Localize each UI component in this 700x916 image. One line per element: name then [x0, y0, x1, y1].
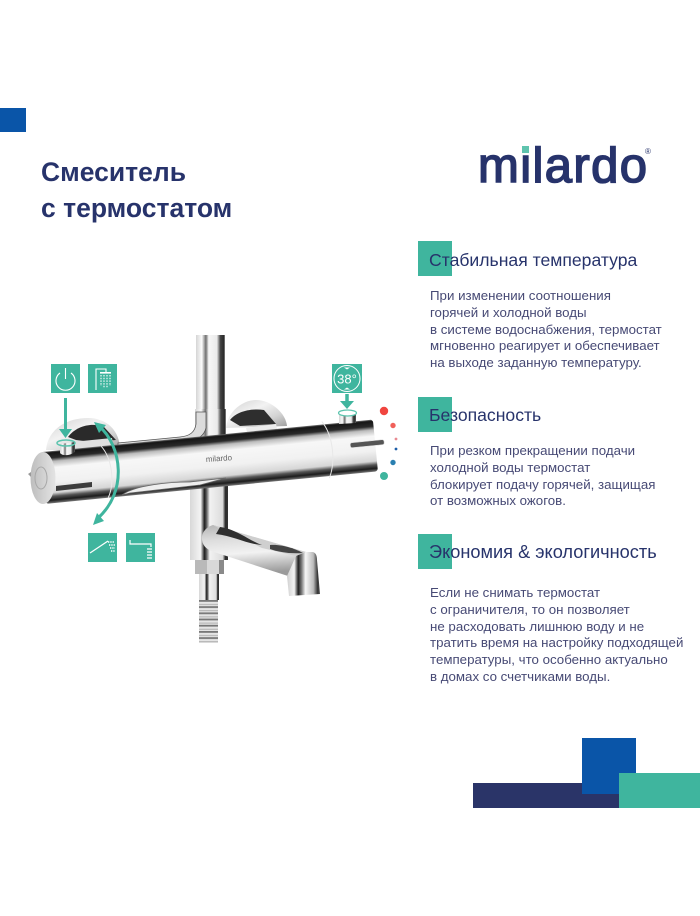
vertical riser pipe — [195, 335, 226, 439]
decorative bar: navy — [473, 783, 623, 808]
flexible hose — [199, 600, 218, 643]
title: с термостатом — [41, 193, 232, 223]
icon: hand shower — [88, 533, 117, 562]
temperature dots — [380, 407, 397, 480]
riser bend into body — [118, 412, 206, 449]
text: stable temperature: мгновенно реагирует и обеспечивает — [430, 338, 660, 353]
icon: 38 degree display — [332, 364, 362, 393]
text: stable temperature: на выходе заданную температуру. — [430, 355, 642, 370]
text: safety: холодной воды термостат — [430, 460, 590, 475]
text: economy: не расходовать лишнюю воду и не — [430, 618, 644, 634]
bath spout — [202, 525, 320, 596]
faucet illustration with callouts — [28, 335, 398, 643]
accent square 2 — [418, 397, 452, 432]
heading: stable temperature: Стабильная температура — [429, 250, 637, 270]
logo: milardo: ® — [645, 147, 651, 156]
hose stem — [199, 574, 219, 600]
text: economy: тратить время на настройку подходящей — [430, 635, 683, 650]
text: stable temperature: горячей и холодной воды — [430, 305, 587, 320]
accent square 1 — [418, 241, 452, 276]
icon: bath spout — [126, 533, 155, 562]
heading: safety: Безопасность — [429, 405, 541, 425]
right groove — [350, 440, 384, 448]
text: safety — [430, 443, 655, 508]
text: economy: с ограничителя, то он позволяет — [430, 602, 630, 617]
arrow: 38 degree to knob — [338, 394, 356, 416]
text: stable temperature: При изменении соотношения — [430, 288, 611, 303]
left selector knob — [60, 442, 75, 455]
left groove — [56, 482, 92, 491]
hose nut — [195, 560, 224, 574]
end cap — [28, 452, 56, 504]
right wall mount — [226, 400, 287, 432]
text: economy: в домах со счетчиками воды. — [430, 669, 610, 684]
decorative bar: teal — [619, 773, 700, 808]
title — [41, 157, 232, 223]
icon: power button — [51, 364, 80, 393]
text: stable temperature — [430, 288, 662, 370]
text: safety: При резком прекращении подачи — [430, 443, 635, 458]
arrow: power button to knob — [57, 398, 75, 446]
heading: economy: Экономия & экологичность — [429, 542, 657, 562]
lower body lump — [122, 478, 226, 495]
arrow: rotation of selector — [93, 422, 118, 525]
right knob — [339, 413, 356, 424]
title: Смеситель — [41, 157, 186, 187]
body branding text: milardo — [206, 453, 233, 464]
text: economy — [430, 585, 683, 684]
icon: overhead shower — [88, 364, 117, 393]
icon: 38 degree display: 38° — [337, 372, 357, 386]
text: stable temperature: в системе водоснабжения, термостат — [430, 322, 662, 336]
text: safety: блокирует подачу горячей, защищая — [430, 476, 655, 492]
text: economy: Если не снимать термостат — [430, 585, 600, 600]
accent square 3 — [418, 534, 452, 569]
thermostat body — [40, 416, 387, 506]
decorative square: blue — [582, 738, 636, 794]
lower vertical outlet — [190, 480, 228, 560]
decorative corner square — [0, 108, 26, 132]
text: economy: температуры, что особенно актуально — [430, 652, 668, 667]
left wall mount — [46, 418, 120, 452]
text: safety: от возможных ожогов. — [430, 493, 566, 508]
